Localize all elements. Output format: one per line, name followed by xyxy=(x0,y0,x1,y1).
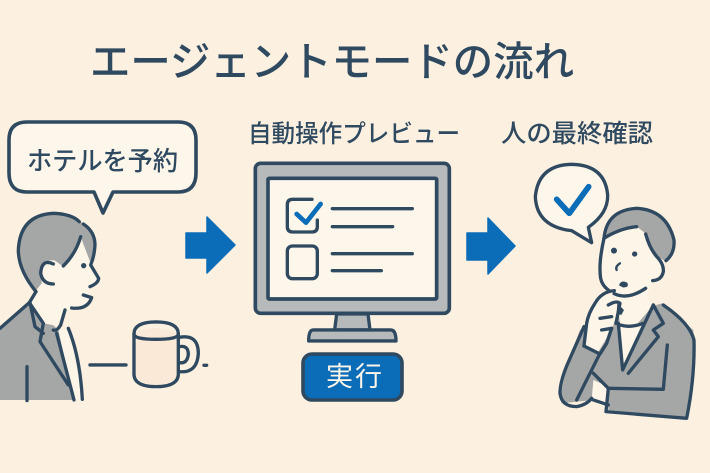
speech bubble: check mark xyxy=(535,164,608,243)
arrow: to confirmation xyxy=(467,218,515,274)
speech bubble: hotel booking: ホテルを予約 xyxy=(27,146,178,176)
panel: automated preview xyxy=(248,120,460,400)
button: execute xyxy=(303,354,402,400)
button: execute: 実行 xyxy=(326,362,382,392)
panel: human final check xyxy=(501,120,694,418)
heading: automated preview: 自動操作プレビュー xyxy=(248,120,460,148)
heading: final human confirmation: 人の最終確認 xyxy=(501,120,653,148)
icon: user in profile xyxy=(0,213,99,401)
icon: thinking person xyxy=(560,208,694,418)
icon: coffee mug on desk xyxy=(90,322,207,387)
icon: monitor with checklist xyxy=(255,163,449,341)
panel: user request xyxy=(0,122,207,401)
speech bubble: hotel booking xyxy=(9,122,196,213)
title: エージェントモードの流れ xyxy=(90,39,574,85)
arrow: to preview xyxy=(186,217,235,273)
